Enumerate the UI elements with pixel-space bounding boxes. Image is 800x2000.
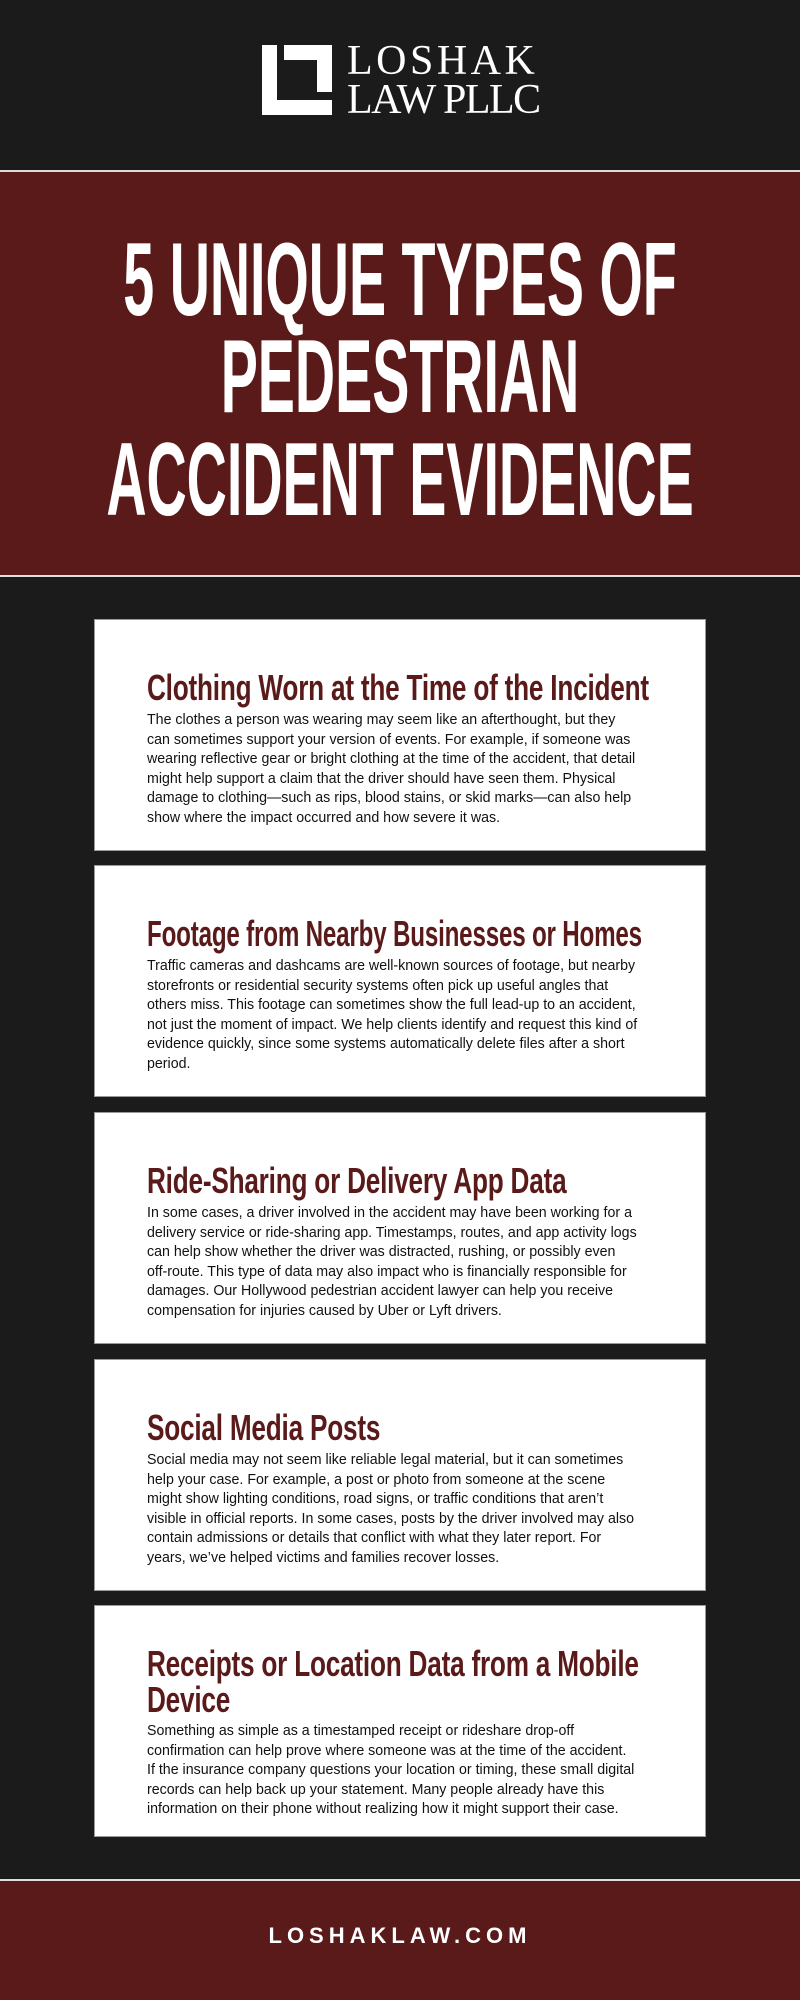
heading: Footage from Nearby Businesses or Homes xyxy=(147,913,642,954)
panel: receipts xyxy=(94,1605,706,1837)
text block: damages. Our Hollywood pedestrian accident lawyer can help you receive xyxy=(147,1283,613,1299)
text block: contain admissions or details that conflict with what they later report. For xyxy=(147,1530,601,1546)
text block: visible in official reports. In some cases, posts by the driver involved may also xyxy=(147,1510,634,1526)
heading xyxy=(147,1643,639,1720)
text block: In some cases, a driver involved in the accident may have been working for a xyxy=(147,1205,632,1221)
text block: wearing reflective gear or bright clothing at the time of the accident, that detail xyxy=(147,751,635,767)
title: 5 UNIQUE TYPES OF xyxy=(123,222,677,338)
text block: show where the impact occurred and how severe it was. xyxy=(147,810,500,826)
text block: confirmation can help prove where someone was at the time of the accident. xyxy=(147,1742,626,1758)
text block xyxy=(147,958,638,1072)
text block: delivery service or ride-sharing app. Timestamps, routes, and app activity logs xyxy=(147,1224,637,1240)
logo text: LAW PLLC xyxy=(347,77,540,123)
text block: If the insurance company questions your location or timing, these small digital xyxy=(147,1762,634,1778)
text block: can help show whether the driver was distracted, rushing, or possibly even xyxy=(147,1244,615,1260)
title banner xyxy=(0,172,800,575)
panel: footage xyxy=(94,865,706,1097)
footer url: LOSHAKLAW.COM xyxy=(268,1923,532,1948)
text block: can sometimes support your version of events. For example, if someone was xyxy=(147,732,630,748)
text block xyxy=(147,1723,634,1817)
heading: Social Media Posts xyxy=(147,1407,380,1448)
panel: social media xyxy=(94,1359,706,1591)
header bar xyxy=(0,0,800,170)
title: ACCIDENT EVIDENCE xyxy=(106,422,694,538)
text block: information on their phone without realizing how it might support their case. xyxy=(147,1801,619,1817)
text block: compensation for injuries caused by Uber or Lyft drivers. xyxy=(147,1302,502,1318)
text block: The clothes a person was wearing may seem like an afterthought, but they xyxy=(147,712,615,728)
heading: Device xyxy=(147,1679,230,1720)
heading: Receipts or Location Data from a Mobile xyxy=(147,1643,639,1684)
icon: logo mark xyxy=(262,45,332,115)
heading: Clothing Worn at the Time of the Incident xyxy=(147,667,649,708)
text block: Traffic cameras and dashcams are well-known sources of footage, but nearby xyxy=(147,958,635,974)
text block: might show lighting conditions, road signs, or traffic conditions that aren’t xyxy=(147,1491,603,1507)
title xyxy=(106,222,694,538)
text block: years, we’ve helped victims and families recover losses. xyxy=(147,1550,499,1566)
text block: Something as simple as a timestamped receipt or rideshare drop-off xyxy=(147,1723,574,1739)
text block: Social media may not seem like reliable legal material, but it can sometimes xyxy=(147,1452,623,1468)
logo text: LOSHAK xyxy=(347,38,538,84)
panel: app data xyxy=(94,1112,706,1344)
heading: Ride-Sharing or Delivery App Data xyxy=(147,1160,566,1201)
text block xyxy=(147,712,635,826)
logo text xyxy=(347,38,540,123)
text block xyxy=(147,1205,637,1318)
text block xyxy=(147,1452,634,1566)
panel: clothing xyxy=(94,619,706,851)
text block: period. xyxy=(147,1056,190,1072)
text block: off-route. This type of data may also impact who is financially responsible for xyxy=(147,1264,627,1280)
text block: might help support a claim that the driver should have seen them. Physical xyxy=(147,770,615,786)
text block: storefronts or residential security systems often pick up useful angles that xyxy=(147,978,608,994)
text block: help your case. For example, a post or photo from someone at the scene xyxy=(147,1472,605,1488)
text block: evidence quickly, since some systems automatically delete files after a short xyxy=(147,1036,625,1052)
footer xyxy=(0,1881,800,2000)
text block: damage to clothing—such as rips, blood stains, or skid marks—can also help xyxy=(147,790,631,806)
text block: not just the moment of impact. We help clients identify and request this kind of xyxy=(147,1016,637,1032)
title: PEDESTRIAN xyxy=(221,319,579,435)
text block: others miss. This footage can sometimes show the full lead-up to an accident, xyxy=(147,997,636,1013)
logo xyxy=(262,38,540,123)
text block: records can help back up your statement. Many people already have this xyxy=(147,1782,604,1798)
